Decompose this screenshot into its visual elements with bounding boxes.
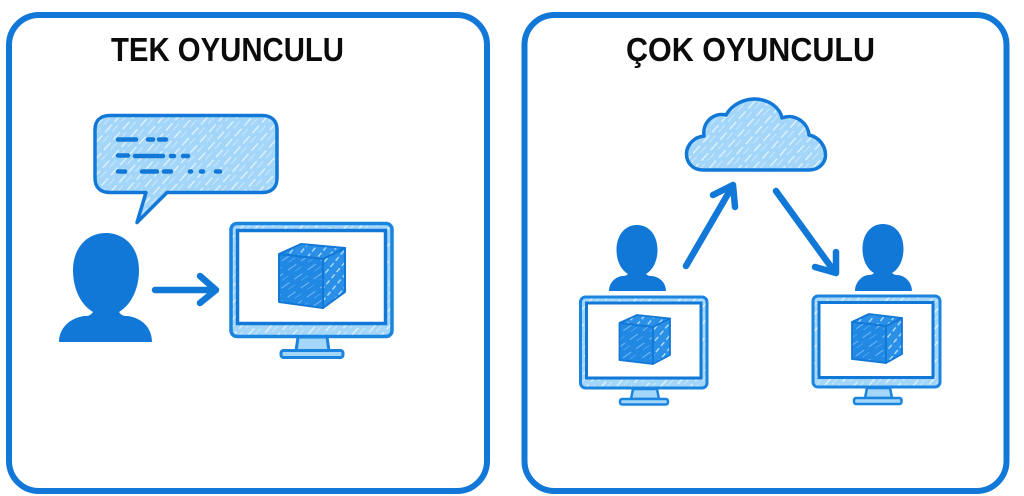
arrow: left player to cloud	[686, 185, 735, 266]
panel: single player	[9, 15, 487, 491]
icon: right monitor	[813, 296, 940, 404]
icon: left monitor	[580, 297, 707, 404]
icon: cube	[279, 244, 345, 308]
arrow: cloud to right player	[776, 191, 836, 273]
icon: right cube	[852, 314, 902, 363]
icon: cloud	[686, 99, 826, 170]
icon: left player	[609, 225, 666, 291]
panel: multiplayer	[524, 15, 1006, 491]
bubble scribbled text	[118, 140, 220, 172]
icon: left cube	[620, 315, 670, 364]
icon: right player	[855, 224, 912, 291]
arrow: player to monitor	[155, 276, 216, 303]
speech bubble	[95, 116, 277, 222]
heading: multiplayer: ÇOK OYUNCULU	[626, 31, 875, 68]
icon: monitor	[231, 224, 392, 358]
heading: single player: TEK OYUNCULU	[111, 31, 344, 68]
icon: player	[59, 233, 152, 342]
